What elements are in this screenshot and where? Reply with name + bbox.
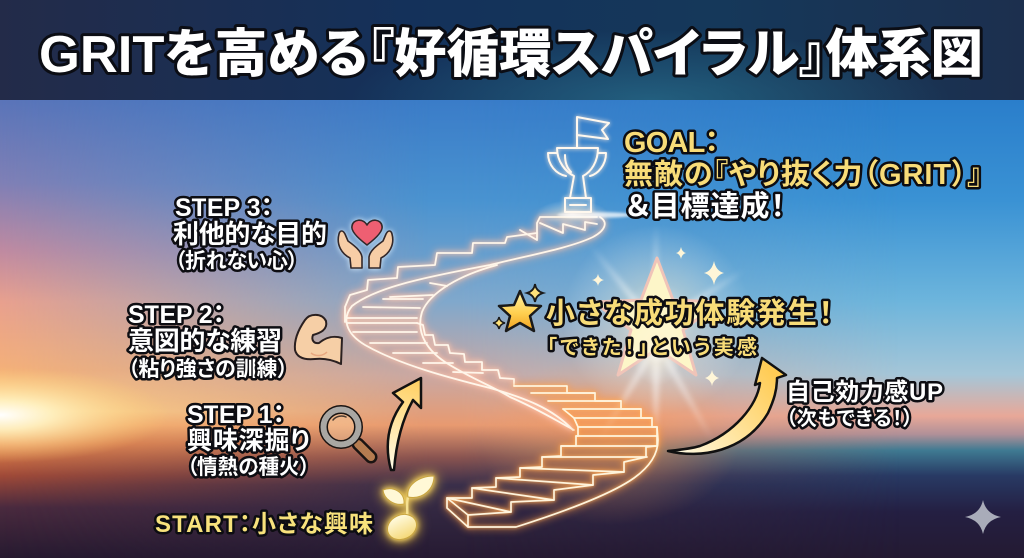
step 3 label: STEP 3：	[175, 194, 273, 222]
icon: glowing sprout	[383, 476, 434, 544]
step 2 label: 意図的な練習	[128, 326, 282, 356]
goal glow	[536, 200, 633, 228]
start label: START：小さな興味	[155, 511, 373, 538]
icon: corner sparkle	[965, 500, 1001, 534]
big glowing star with rays	[562, 225, 752, 440]
lower staircase section	[447, 386, 658, 527]
header band	[0, 0, 1024, 100]
step 1 label: 興味深掘り	[187, 427, 310, 455]
icon: flexed arm	[295, 315, 342, 364]
step 1 label: （情熱の種火）	[187, 456, 310, 479]
small success label	[546, 297, 833, 359]
goal label: 無敵の『やり抜く力（GRIT）』	[624, 158, 982, 191]
small success label: 「できた！」という実感	[547, 335, 757, 359]
small success label: 小さな成功体験発生！	[546, 297, 833, 330]
self-efficacy label	[786, 379, 943, 430]
self-efficacy label: （次もできる！）	[786, 407, 913, 430]
icon: magnifying glass	[324, 410, 371, 457]
step 2 label: STEP 2：	[128, 301, 225, 329]
step 1 label	[187, 401, 310, 479]
title: GRITを高める『好循環スパイラル』体系図	[39, 26, 983, 84]
step 2 label: （粘り強さの訓練）	[128, 358, 288, 381]
goal label	[624, 127, 982, 223]
icon: trophy and flag	[548, 117, 609, 212]
step 1 label: STEP 1：	[187, 401, 285, 429]
icon: small gold star	[493, 284, 543, 331]
step 3 label: （折れない心）	[175, 250, 298, 273]
step 3 label	[173, 194, 327, 273]
arrow: self-efficacy up	[668, 358, 786, 454]
upper staircase section	[345, 217, 605, 430]
arrow: start to steps	[388, 378, 421, 470]
icon: heart in hands	[338, 220, 393, 268]
self-efficacy label: 自己効力感UP	[786, 379, 943, 406]
sparkles around big star	[592, 247, 724, 386]
step 3 label: 利他的な目的	[173, 219, 327, 249]
step 2 label	[128, 301, 288, 381]
goal label: ＆目標達成！	[626, 190, 785, 223]
spiral staircase	[345, 217, 658, 527]
goal label: GOAL：	[624, 127, 719, 159]
